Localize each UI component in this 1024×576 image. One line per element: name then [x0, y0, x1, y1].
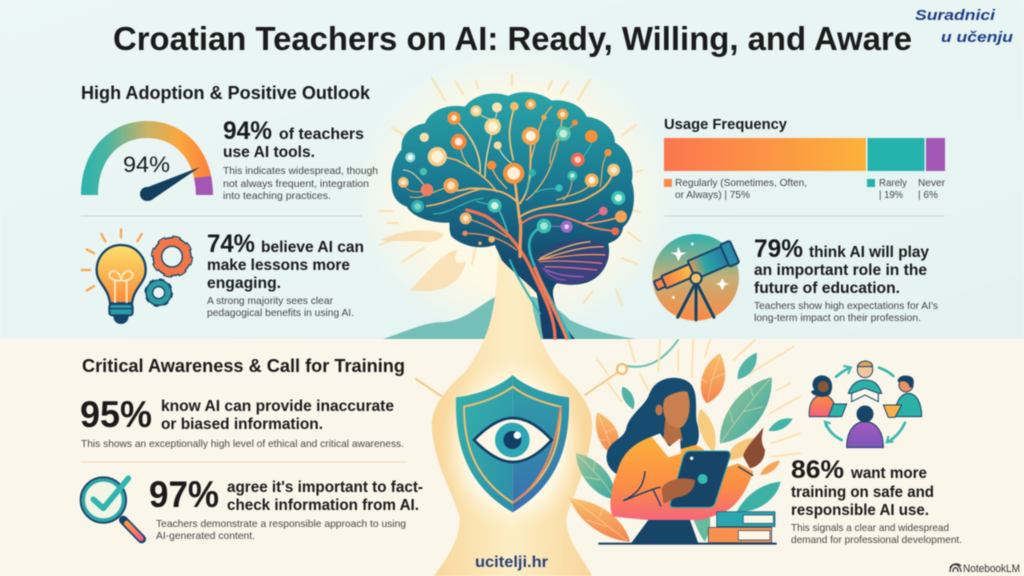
- legend: | 19%: [879, 190, 903, 201]
- illustration: glowing vase-shaped light column: [432, 250, 592, 576]
- logo text: Suradnici u učenju: [915, 7, 1013, 46]
- tablet: [670, 451, 730, 507]
- stat: 95% inaccurate or biased: This shows an exceptionally high level of ethical and critical awareness.: [81, 439, 404, 450]
- stat: 95% inaccurate or biased: know AI can provide inaccurate: [161, 398, 394, 415]
- cerebellum: [533, 239, 609, 284]
- light branches: [403, 107, 614, 237]
- illustration: wispy shapes left of brain: [380, 230, 466, 291]
- stat: 86% want training: demand for professional development.: [791, 535, 962, 546]
- hands: [662, 478, 695, 503]
- stat: 94% of teachers: 94%: [223, 117, 272, 145]
- stat: 79% future of education: an important role in the: [754, 262, 927, 279]
- illustration: connector lines from shield: [416, 340, 678, 396]
- desk line: [598, 541, 777, 547]
- stat: 74% engaging lessons: make lessons more: [207, 257, 350, 274]
- stat: 86% want training: want more: [850, 465, 927, 482]
- gauge chart 94%: [81, 121, 213, 201]
- illustration: brain tree: [391, 92, 634, 339]
- panel: training: [791, 361, 962, 546]
- heading: critical awareness: Critical Awareness & Call for Training: [82, 356, 405, 376]
- stat: 97% fact-check: check information from AI.: [227, 497, 419, 514]
- legend: Regularly (Sometimes, Often,: [675, 178, 807, 189]
- stat: 95% inaccurate or biased: [80, 394, 404, 450]
- stat: 94% of teachers: not always frequent, integration: [223, 179, 369, 190]
- brain silhouette: [391, 92, 634, 339]
- legend: [664, 178, 946, 201]
- stat: 86% want training: 86%: [791, 456, 844, 484]
- leaves: [570, 353, 793, 542]
- stat: 95% inaccurate or biased: 95%: [80, 394, 152, 435]
- legend: Rarely: [879, 178, 908, 189]
- stat: 79% future of education: [754, 235, 938, 324]
- stat: 86% want training: This signals a clear and widespread: [791, 523, 949, 534]
- stat: 79% future of education: long-term impact on their profession.: [754, 313, 921, 324]
- stat: 94% of teachers: into teaching practices.: [223, 191, 331, 202]
- stat: 94% of teachers: This indicates widespread, though: [223, 166, 378, 177]
- hair: [607, 378, 699, 480]
- stat: 97% fact-check: agree it's important to fact-: [227, 479, 423, 496]
- stat: 79% future of education: future of education.: [754, 280, 900, 297]
- illustration: halo behind shield: [441, 355, 585, 535]
- logo text: Suradnici u učenju: u učenju: [941, 29, 1013, 46]
- NotebookLM badge: NotebookLM: [963, 563, 1020, 575]
- stat: 97% fact-check: [149, 474, 423, 542]
- face and neck: [655, 391, 690, 447]
- stat: 86% want training: [791, 456, 962, 546]
- legend: | 6%: [918, 190, 938, 201]
- title: Croatian Teachers on AI: Ready, Willing, and Aware: [113, 20, 912, 57]
- stat: 74% engaging lessons: pedagogical benefits in using AI.: [207, 308, 354, 319]
- neural nodes: [398, 99, 627, 245]
- panel: critical awareness: [80, 356, 423, 542]
- stat: 74% engaging lessons: engaging.: [207, 275, 281, 292]
- icon: light bulb with gears: [82, 229, 190, 324]
- illustration: teacher with tablet among leaves: [570, 340, 800, 544]
- skirt: [631, 520, 698, 543]
- legend: Never: [918, 178, 946, 189]
- heading: usage frequency: Usage Frequency: [664, 117, 787, 133]
- stat: 86% want training: responsible AI use.: [791, 502, 929, 519]
- stat: 95% inaccurate or biased: or biased information.: [161, 416, 323, 433]
- books: [708, 512, 775, 543]
- logo text: Suradnici u učenju: Suradnici: [915, 7, 996, 24]
- stat: 86% want training: training on safe and: [791, 484, 934, 501]
- background: lower section: [0, 339, 1024, 576]
- background glow behind brain: [355, 50, 675, 340]
- illustration: light rays around brain: [380, 74, 643, 305]
- stat: 79% future of education: think AI will play: [809, 244, 929, 261]
- icon: group of teachers exchanging: [809, 361, 922, 448]
- icon: magnifier with check: [81, 477, 142, 539]
- stat: 94% of teachers: [223, 117, 378, 202]
- background: upper section: [0, 0, 1024, 340]
- stat: 74% engaging lessons: 74%: [207, 230, 255, 258]
- panel: usage frequency: [651, 117, 946, 324]
- stat: 79% future of education: Teachers show high expectations for AI's: [754, 301, 938, 312]
- arm line: [623, 472, 661, 506]
- gauge chart 94%: 94%: [123, 152, 170, 177]
- stacked bar chart: [664, 138, 945, 171]
- legend: or Always) | 75%: [675, 190, 750, 201]
- stat: 74% engaging lessons: A strong majority sees clear: [207, 296, 334, 307]
- stat: 94% of teachers: of teachers: [279, 126, 364, 143]
- stat: 97% fact-check: Teachers demonstrate a responsible approach to using: [156, 519, 406, 530]
- heading: high adoption: High Adoption & Positive Outlook: [81, 83, 371, 103]
- site label: ucitelji.hr: [475, 554, 548, 571]
- stat: 97% fact-check: AI-generated content.: [156, 531, 255, 542]
- sweater: [610, 437, 753, 520]
- illustration: distant hills: [383, 295, 637, 339]
- icon: telescope: [651, 234, 739, 321]
- icon: shield with eye: [456, 375, 569, 512]
- stat: 94% of teachers: use AI tools.: [223, 144, 315, 161]
- stat: 79% future of education: 79%: [754, 235, 803, 263]
- panel: high adoption: [81, 83, 378, 324]
- stat: 97% fact-check: 97%: [149, 474, 219, 515]
- sun rays: [597, 340, 800, 457]
- stat: 74% engaging lessons: [207, 230, 364, 319]
- stat: 74% engaging lessons: believe AI can: [261, 239, 364, 256]
- trunk branches: [465, 210, 621, 338]
